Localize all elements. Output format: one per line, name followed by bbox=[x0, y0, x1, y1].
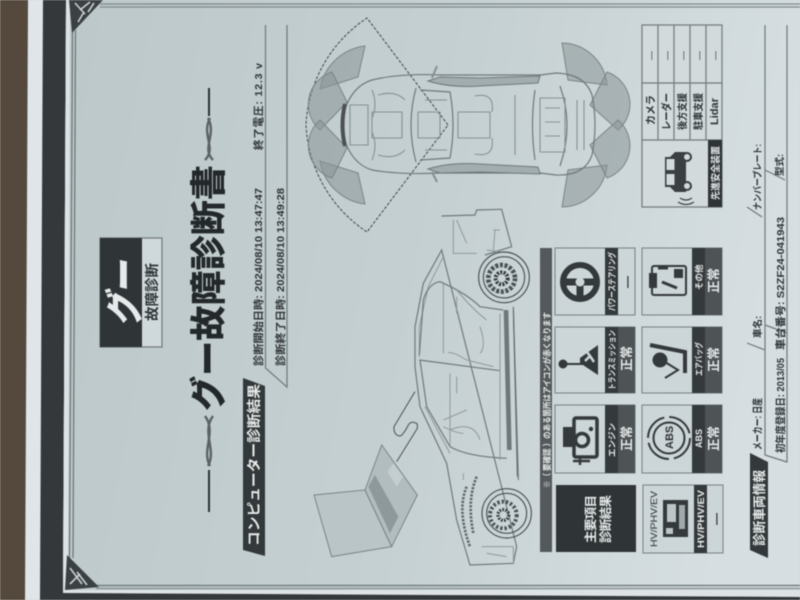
end voltage: 終了電圧: 12.3 v bbox=[252, 63, 265, 150]
table: advanced safety devices: カメラ bbox=[645, 95, 657, 125]
title rule with ornament: bottom bbox=[205, 416, 213, 512]
table: advanced safety devices: Lidar bbox=[709, 97, 721, 125]
car body outline bbox=[344, 73, 595, 175]
panel: engine bbox=[555, 405, 635, 473]
panel: HV/PHV/EV: — bbox=[709, 513, 723, 525]
panel: engine: エンジン bbox=[607, 423, 617, 457]
icon: airbag bbox=[650, 345, 685, 378]
section heading: computer diagnosis result: コンピューター診断結果 bbox=[246, 384, 262, 546]
roof inner line bbox=[419, 257, 450, 453]
mirrors bbox=[432, 66, 437, 182]
model: 型式: bbox=[774, 154, 786, 176]
rear suspension bbox=[487, 230, 500, 252]
panel: engine: 正常 bbox=[619, 426, 634, 451]
table: advanced safety devices: — bbox=[710, 51, 720, 60]
icon: steering wheel bbox=[563, 265, 597, 299]
panel: HV/PHV/EV: HV/PHV/EV bbox=[696, 490, 706, 548]
panel: power steering: — bbox=[620, 276, 634, 288]
table: advanced safety devices bbox=[642, 25, 722, 207]
icon: engine bbox=[563, 418, 597, 465]
cable bbox=[394, 392, 417, 462]
table: advanced safety devices: 駐車支援 bbox=[692, 93, 705, 130]
front bumper bbox=[342, 104, 345, 146]
end time: 診断終了日時: 2024/08/10 13:49:28 bbox=[274, 188, 287, 366]
panel: transmission: トランスミッション bbox=[607, 330, 617, 390]
title: グー故障診断書 bbox=[188, 165, 229, 411]
section heading: vehicle information bbox=[750, 453, 768, 558]
vehicle info rows bbox=[747, 25, 787, 462]
panel: ABS bbox=[642, 405, 722, 473]
windshield and roof bbox=[411, 86, 567, 166]
table: advanced safety devices: レーダー bbox=[660, 93, 673, 130]
panel: power steering bbox=[555, 248, 635, 315]
interior details bbox=[350, 90, 584, 160]
page white margin left bbox=[63, 0, 70, 590]
background: wooden table bbox=[0, 0, 30, 600]
front wheel bbox=[462, 477, 531, 547]
page white margin bottom bbox=[63, 590, 800, 597]
table: advanced safety devices: — bbox=[646, 51, 656, 60]
car name: 車名: bbox=[752, 316, 764, 338]
laptop bbox=[314, 445, 417, 557]
logo: グー 故障診断: グー bbox=[103, 254, 147, 329]
number plate: ナンバープレート: bbox=[753, 144, 764, 210]
section heading: vehicle information: 診断車両情報 bbox=[752, 470, 767, 546]
panel: ABS: ABS bbox=[694, 429, 704, 448]
panel: airbag: 正常 bbox=[706, 347, 721, 372]
panel: airbag: エアバッグ bbox=[694, 342, 704, 376]
table: advanced safety devices: 先進安全装置 bbox=[710, 146, 722, 200]
side windows bbox=[428, 76, 540, 174]
panel: power steering: パワーステアリング bbox=[607, 252, 617, 311]
section heading: computer diagnosis result bbox=[243, 378, 265, 556]
panel: HV/PHV/EV: HV/PHV/EV bbox=[649, 491, 659, 547]
table: advanced safety devices: — bbox=[678, 51, 688, 60]
panel: HV/PHV/EV bbox=[643, 485, 723, 553]
front suspension bbox=[482, 547, 513, 563]
icon: HV battery meter bbox=[663, 500, 688, 537]
seats and interior bbox=[443, 220, 500, 480]
icon: clipboard bbox=[649, 266, 686, 295]
note bar bbox=[540, 248, 552, 552]
panel: other bbox=[642, 248, 722, 315]
corner ornament: bottom left bbox=[65, 555, 99, 590]
logo: グー 故障診断 bbox=[100, 238, 162, 347]
panel: transmission: 正常 bbox=[619, 346, 634, 371]
cabin windows bbox=[419, 282, 507, 458]
panel: main items diagnosis result heading bbox=[556, 485, 636, 552]
body outline bbox=[415, 209, 518, 565]
dark band bottom bbox=[63, 593, 800, 600]
panel: main items diagnosis result heading: 診断結果 bbox=[598, 495, 613, 543]
panel: other: その他 bbox=[694, 264, 704, 290]
table: advanced safety devices: 後方支援 bbox=[676, 93, 689, 130]
panel: airbag bbox=[642, 327, 722, 393]
corner ornament: top left bbox=[69, 0, 103, 33]
panel: main items diagnosis result heading: 主要項目 bbox=[583, 495, 598, 543]
logo: グー 故障診断: 故障診断 bbox=[144, 263, 160, 321]
diagram: car side view with connected laptop bbox=[314, 209, 531, 565]
icon: ABS: ABS bbox=[664, 426, 676, 449]
background: dark band bbox=[40, 0, 66, 600]
sensor coverage: front camera dashed sector bbox=[306, 18, 448, 232]
diagnosis time rows bbox=[252, 25, 287, 387]
first registration: 初年度登録日: 2013/05 bbox=[774, 358, 787, 453]
icon: gear shift bbox=[558, 345, 598, 375]
table: advanced safety devices: — bbox=[694, 51, 704, 60]
start time: 診断開始日時: 2024/08/10 13:47:47 bbox=[252, 188, 265, 366]
chassis number: 車台番号: S2ZF24-041943 bbox=[774, 217, 787, 350]
icon: car with sensor waves bbox=[665, 152, 694, 204]
maker: メーカー: 日産 bbox=[751, 398, 764, 450]
diagram: car top view with sensor ranges bbox=[306, 18, 630, 232]
note bar: ※（ 要確認 ）のある箇所はアイコンが赤くなります bbox=[542, 312, 552, 488]
rear wheel bbox=[479, 252, 529, 303]
table: advanced safety devices: — bbox=[662, 51, 672, 60]
background: white sheet edge bbox=[25, 0, 43, 600]
panel: ABS: 正常 bbox=[706, 426, 721, 451]
sensor fans bbox=[308, 43, 630, 207]
panel: other: 正常 bbox=[706, 268, 721, 293]
panel: transmission bbox=[555, 327, 635, 393]
title rule with ornament: top bbox=[205, 88, 213, 160]
sill bbox=[506, 310, 509, 450]
